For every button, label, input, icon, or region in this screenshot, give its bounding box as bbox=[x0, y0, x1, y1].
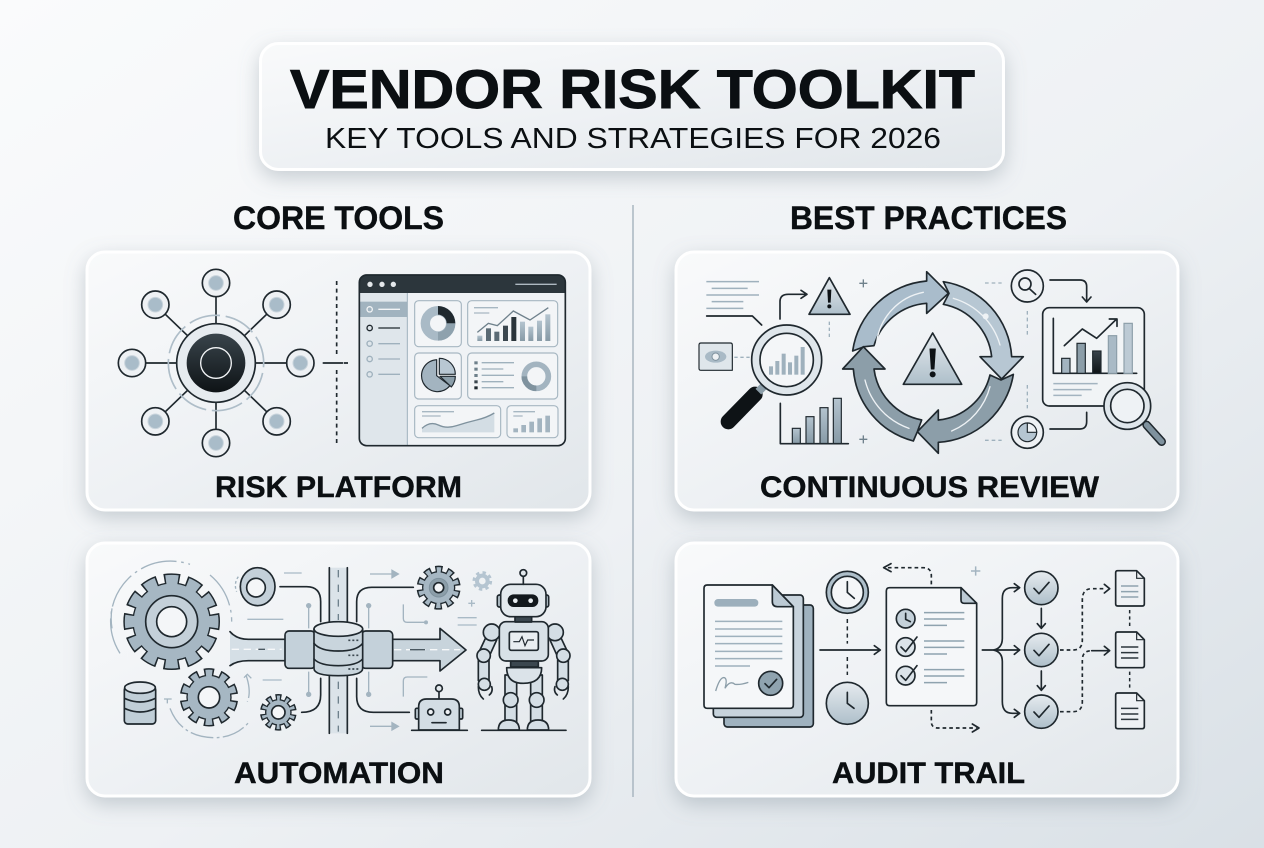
hub and spoke network icon bbox=[118, 269, 350, 457]
small robot icon bbox=[412, 685, 467, 730]
label: audit trail: AUDIT TRAIL bbox=[832, 757, 1025, 790]
label: continuous review: CONTINUOUS REVIEW bbox=[760, 471, 1100, 504]
pipeline and database icon bbox=[230, 568, 466, 733]
panel: continuous review bbox=[676, 252, 1178, 510]
panel: automation bbox=[87, 543, 590, 796]
report chart and magnifier icon bbox=[985, 270, 1162, 448]
label: automation: AUTOMATION bbox=[234, 757, 444, 790]
subtitle: KEY TOOLS AND STRATEGIES FOR 2026 bbox=[325, 123, 941, 155]
gears icon group bbox=[111, 561, 491, 738]
magnifier with bars icon bbox=[699, 278, 867, 444]
checklist document icon bbox=[884, 564, 980, 732]
label: risk platform: RISK PLATFORM bbox=[215, 471, 462, 504]
cycle arrows with warning icon bbox=[843, 272, 1023, 453]
heading: best practices: BEST PRACTICES bbox=[790, 200, 1067, 236]
title box bbox=[260, 44, 1004, 170]
title: VENDOR RISK TOOLKIT bbox=[290, 58, 975, 120]
branching check flow icon bbox=[982, 571, 1144, 729]
large robot icon bbox=[477, 570, 570, 730]
stacked signed documents icon bbox=[704, 585, 813, 727]
heading: core tools: CORE TOOLS bbox=[233, 200, 444, 236]
clocks and arrow icon bbox=[820, 571, 880, 724]
panel: risk platform bbox=[87, 252, 590, 510]
panel: audit trail bbox=[676, 543, 1178, 796]
dashboard window icon bbox=[359, 275, 565, 446]
